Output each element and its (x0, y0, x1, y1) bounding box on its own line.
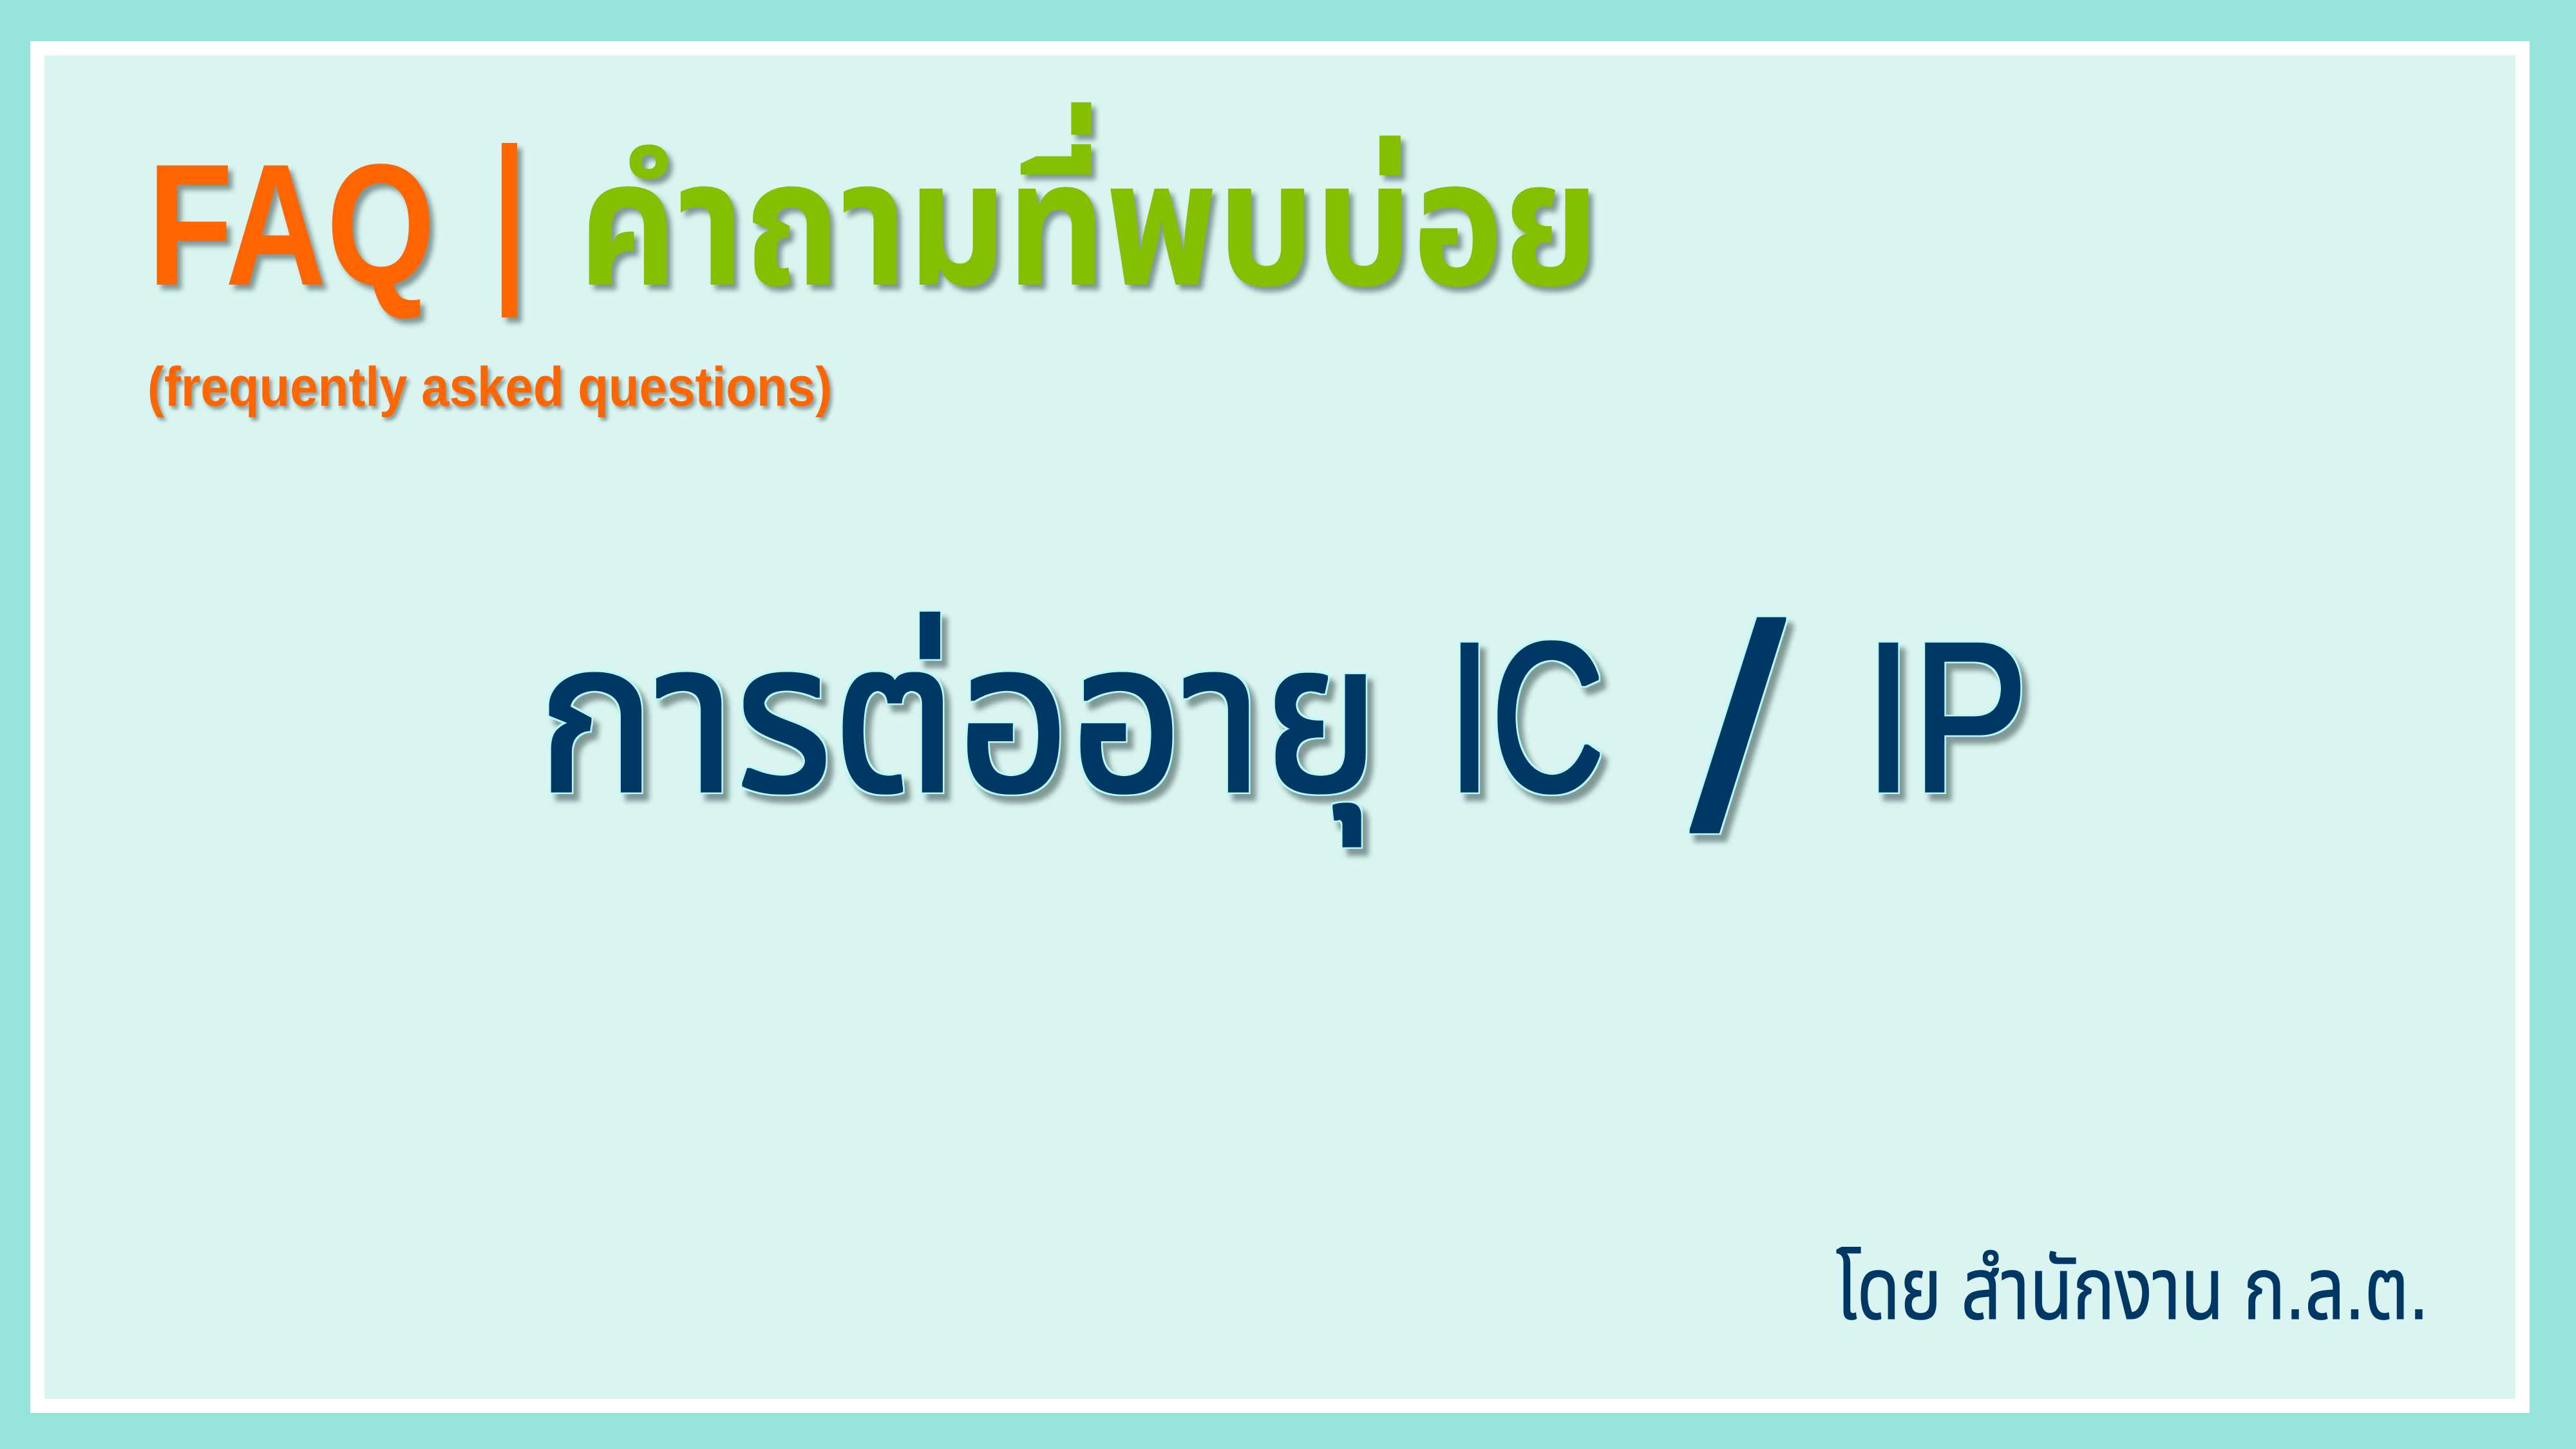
heading: frequently asked questions in Thai: คำถามที่พบบ่อย (578, 100, 1599, 322)
heading divider bar (502, 143, 517, 317)
heading: FAQ: FAQ (147, 128, 435, 322)
footer credit: โดย สำนักงาน ก.ล.ต. (1836, 1240, 2429, 1338)
subtitle: (frequently asked questions) (147, 356, 832, 418)
main title: Thai words: การต่ออายุ (538, 601, 1380, 847)
main title: IC: IC (1448, 598, 1604, 837)
main title: IP: IP (1864, 598, 2028, 837)
main title: slash: / (1691, 567, 1786, 891)
main title (538, 567, 2028, 891)
